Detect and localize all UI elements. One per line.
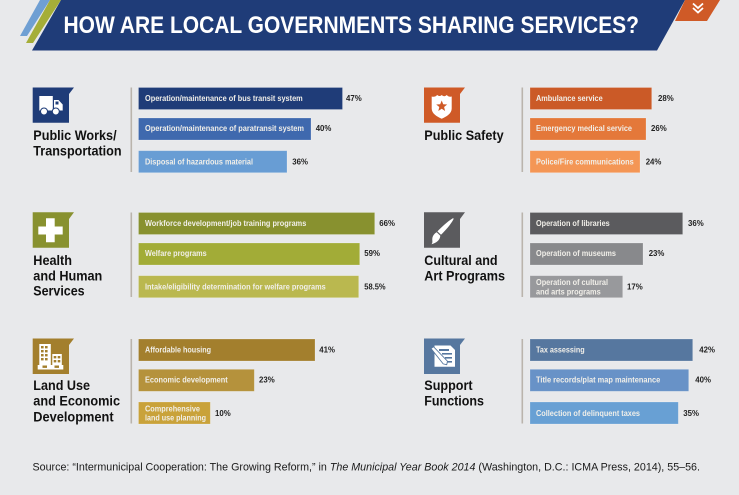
- bar chart: Title records/plat map maintenance: [536, 376, 661, 384]
- heading: Public Safety: [424, 127, 504, 143]
- heading: and Human: [33, 268, 102, 284]
- bar chart: 23%: [259, 376, 275, 384]
- source note: Source: “Intermunicipal Cooperation: The Growing Reform,” in The Municipal Year Book 2014 (Washington, D.C.: ICMA Press, 2014), 55–56.: [32, 462, 700, 474]
- bar chart: [530, 88, 674, 173]
- bar chart: Operation of cultural: [536, 278, 608, 287]
- heading: Services: [33, 283, 85, 299]
- bar chart: Operation/maintenance of paratransit system: [145, 124, 304, 133]
- bar chart: land use planning: [145, 414, 206, 423]
- heading: and Economic: [33, 393, 120, 409]
- heading: Support: [424, 377, 473, 393]
- panel: health: [33, 212, 396, 299]
- bar chart: 58.5%: [364, 283, 386, 292]
- panel: public safety: [424, 88, 674, 173]
- bar chart: 10%: [215, 409, 231, 418]
- bar chart: [138, 212, 396, 298]
- bar chart: Intake/eligibility determination for welfare programs: [145, 283, 326, 292]
- bar chart: Welfare programs: [145, 249, 207, 258]
- bar chart: 40%: [695, 376, 712, 384]
- bar chart: 26%: [651, 124, 667, 133]
- bar chart: 42%: [699, 346, 716, 355]
- bar chart: [138, 88, 362, 173]
- icon: paintbrush: [424, 212, 465, 248]
- heading: Development: [33, 408, 114, 424]
- panel: public works: [33, 88, 362, 173]
- icon: document and pencil: [424, 338, 465, 374]
- title banner: [20, 0, 720, 50]
- heading: Land Use: [33, 377, 90, 393]
- bar chart: Operation/maintenance of bus transit system: [145, 94, 303, 103]
- bar chart: 36%: [688, 219, 704, 228]
- bar chart: Operation of museums: [536, 249, 616, 258]
- panel: culture: [424, 212, 704, 298]
- bar chart: Disposal of hazardous material: [145, 158, 253, 167]
- bar chart: 47%: [346, 94, 362, 103]
- icon: buildings: [33, 338, 74, 374]
- icon: truck: [33, 88, 74, 123]
- bar chart: Comprehensive: [145, 404, 200, 414]
- heading: Health: [33, 252, 72, 268]
- bar chart: 28%: [658, 94, 674, 103]
- heading: Public Works/: [33, 127, 117, 143]
- icon: double chevron: [693, 4, 703, 12]
- heading: Art Programs: [424, 268, 505, 284]
- bar chart: Collection of delinquent taxes: [536, 409, 640, 418]
- icon: police badge: [424, 88, 465, 123]
- bar chart: [530, 339, 716, 424]
- heading: Cultural and: [424, 252, 498, 268]
- bar chart: 40%: [316, 124, 332, 133]
- bar chart: and arts programs: [536, 288, 601, 296]
- panel: land use: [33, 338, 336, 424]
- heading: Functions: [424, 393, 484, 409]
- bar chart: Affordable housing: [145, 346, 211, 355]
- bar chart: 41%: [319, 346, 336, 355]
- bar chart: Police/Fire communications: [536, 158, 634, 167]
- bar chart: 36%: [292, 158, 309, 167]
- bar chart: [530, 212, 704, 298]
- bar chart: Tax assessing: [536, 346, 585, 355]
- bar chart: Operation of libraries: [536, 219, 610, 228]
- bar chart: Emergency medical service: [536, 124, 632, 133]
- heading: Transportation: [33, 142, 122, 158]
- icon: plus: [33, 212, 74, 248]
- bar chart: 24%: [646, 158, 662, 167]
- bar chart: [138, 339, 336, 424]
- bar chart: 17%: [627, 283, 643, 292]
- bar chart: Ambulance service: [536, 94, 603, 103]
- bar chart: 66%: [379, 219, 396, 228]
- heading: HOW ARE LOCAL GOVERNMENTS SHARING SERVICES?: [64, 12, 639, 39]
- bar chart: 59%: [364, 249, 381, 258]
- bar chart: 35%: [683, 409, 700, 418]
- panel: support functions: [424, 338, 716, 424]
- bar chart: Economic development: [145, 376, 228, 384]
- bar chart: 23%: [649, 249, 665, 258]
- bar chart: Workforce development/job training programs: [145, 219, 307, 228]
